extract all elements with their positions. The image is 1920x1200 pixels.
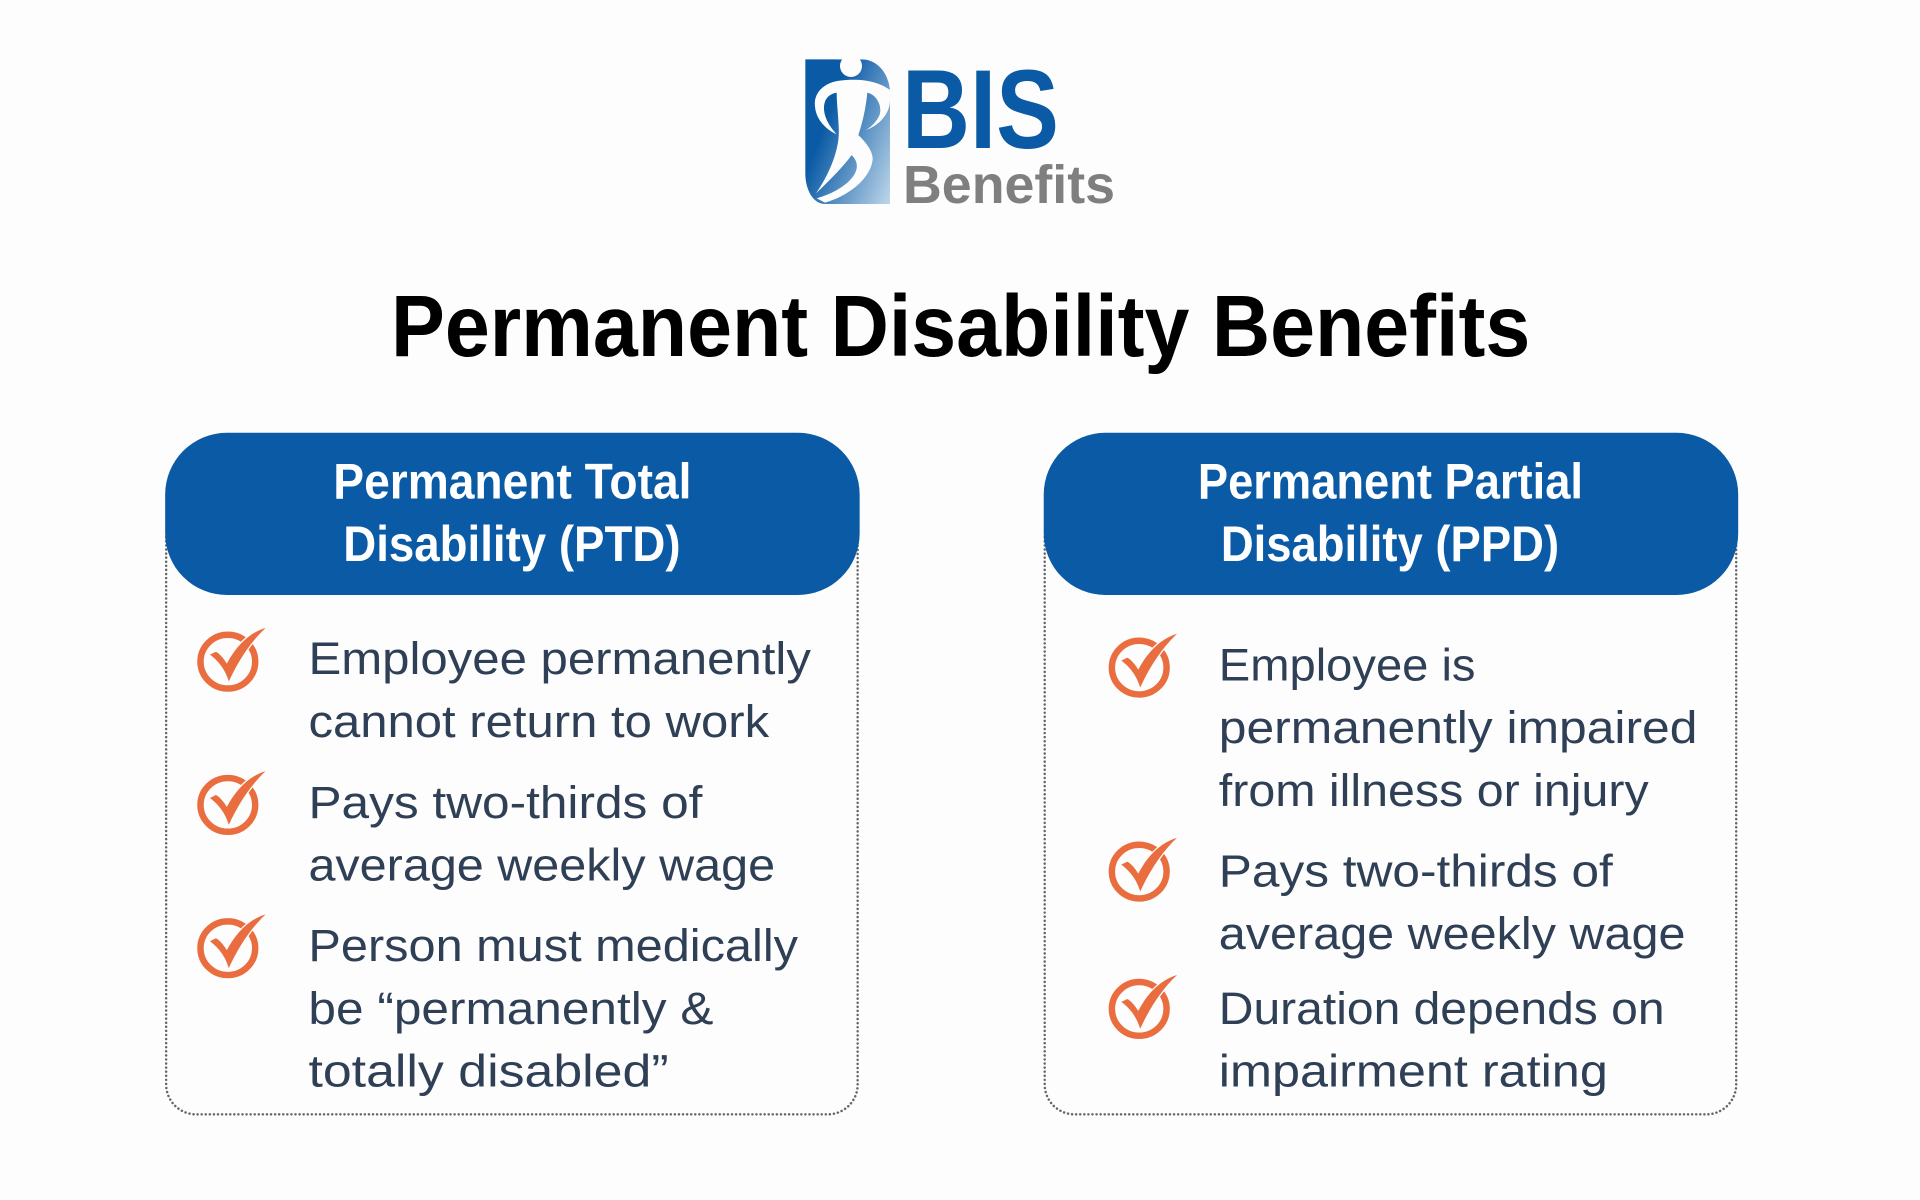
header: PTD xyxy=(165,433,860,595)
item: medically disabled xyxy=(200,914,798,1096)
logo wordmark: BIS: BIS xyxy=(902,47,1059,172)
panel: permanent partial disability xyxy=(1044,433,1738,1114)
item: permanently impaired: Employee is xyxy=(1219,640,1476,691)
item: permanently impaired: from illness or injury xyxy=(1219,765,1649,816)
header: PPD xyxy=(1044,433,1738,595)
item: medically disabled: totally disabled” xyxy=(308,1045,669,1096)
item: duration xyxy=(1112,975,1665,1096)
header: PTD: Permanent Total xyxy=(333,453,691,509)
header: PPD: Permanent Partial xyxy=(1198,453,1583,509)
item: cannot return to work xyxy=(200,628,811,747)
item: cannot return to work: cannot return to work xyxy=(308,696,769,747)
item: pays two-thirds: Pays two-thirds of xyxy=(1219,846,1613,897)
item: pays two-thirds: average weekly wage xyxy=(308,840,775,891)
item: pays two-thirds: average weekly wage xyxy=(1219,908,1685,959)
item: pays two-thirds: Pays two-thirds of xyxy=(308,777,703,828)
item: medically disabled: Person must medically xyxy=(308,920,798,971)
logo xyxy=(805,47,1115,215)
icon: shield with running figure xyxy=(805,55,890,204)
panel: permanent total disability xyxy=(165,433,860,1114)
logo wordmark: Benefits: Benefits xyxy=(903,155,1115,215)
item: pays two-thirds xyxy=(200,771,775,891)
item: duration: Duration depends on xyxy=(1219,983,1665,1034)
item: duration: impairment rating xyxy=(1219,1045,1608,1096)
header: PPD: Disability (PPD) xyxy=(1221,516,1559,572)
item: permanently impaired: permanently impaired xyxy=(1219,702,1697,753)
item: medically disabled: be “permanently & xyxy=(308,983,713,1034)
header: PTD: Disability (PTD) xyxy=(343,516,681,572)
title: Permanent Disability Benefits xyxy=(391,277,1530,375)
item: permanently impaired xyxy=(1112,634,1697,816)
item: pays two-thirds xyxy=(1112,838,1685,959)
item: cannot return to work: Employee permanently xyxy=(308,633,811,684)
